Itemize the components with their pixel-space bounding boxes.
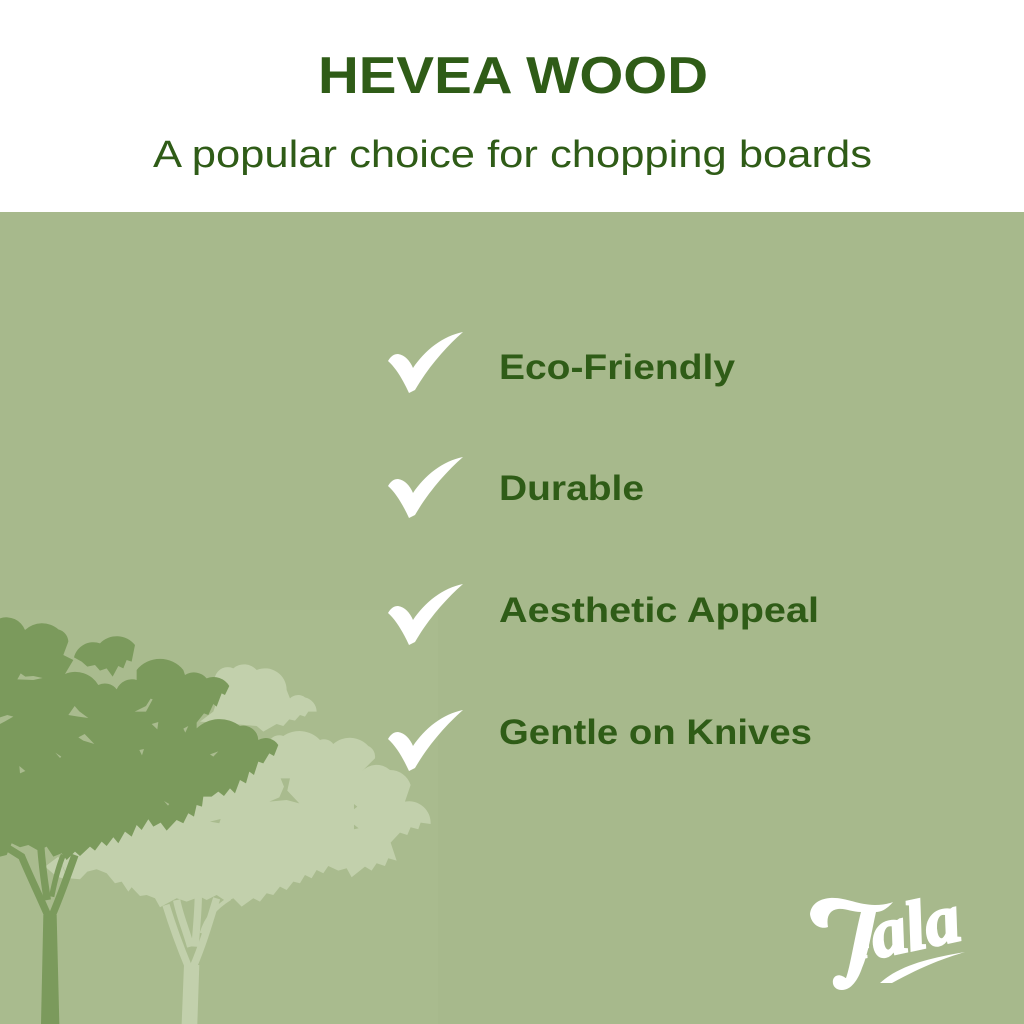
logo wordmark: T [854, 939, 872, 964]
icon: check [388, 584, 463, 645]
subtitle: A popular choice for chopping boards [153, 134, 872, 176]
logo T swash [810, 898, 893, 990]
icon: check [388, 332, 463, 393]
tree illustration [0, 617, 431, 1024]
logo wordmark: ala [863, 880, 967, 974]
item: Gentle on Knives [388, 710, 812, 771]
label: Durable [499, 469, 644, 508]
logo: Tala [810, 880, 967, 990]
label: Gentle on Knives [499, 713, 812, 752]
header panel [0, 0, 1024, 212]
lighter illustration backdrop [0, 610, 438, 1024]
icon: check [388, 457, 463, 518]
label: Eco-Friendly [499, 348, 736, 387]
title: HEVEA WOOD [318, 47, 708, 105]
dark tree holes [0, 673, 218, 806]
item: Aesthetic Appeal [388, 584, 819, 645]
check list [388, 332, 819, 771]
label: Aesthetic Appeal [499, 591, 819, 630]
icon: check [388, 710, 463, 771]
light tree holes [210, 778, 359, 829]
light tree [45, 664, 431, 1024]
logo swoosh [880, 952, 965, 983]
item: Durable [388, 457, 644, 518]
green background panel [0, 212, 1024, 1024]
item: Eco-Friendly [388, 332, 736, 393]
dark tree [0, 617, 278, 1024]
